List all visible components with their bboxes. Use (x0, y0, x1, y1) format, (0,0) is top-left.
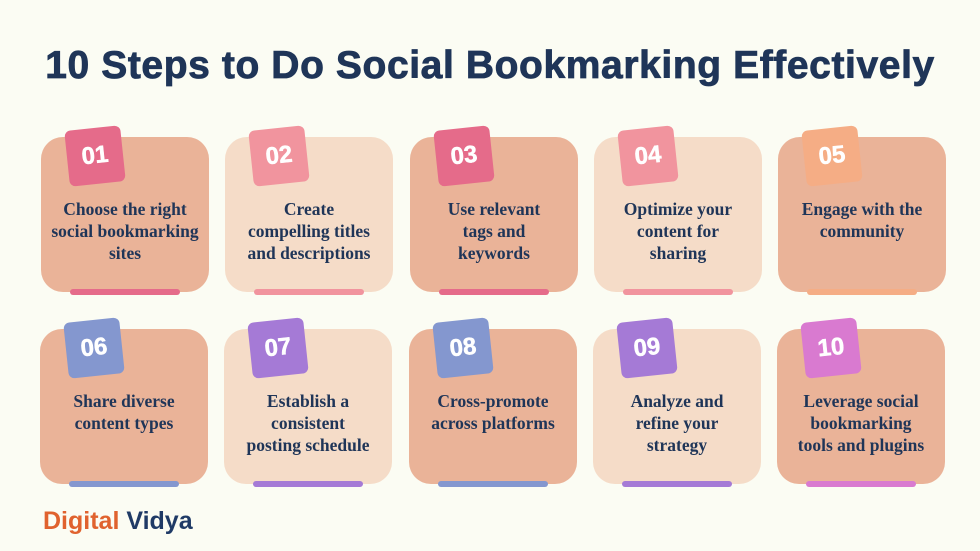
card 10: 10 (816, 333, 846, 362)
card 04: content for (637, 221, 719, 241)
card 03 (410, 137, 578, 292)
card 07: posting schedule (246, 435, 370, 455)
card 10: bookmarking (810, 413, 912, 433)
card 07: consistent (271, 413, 345, 433)
card 04: 04 (633, 141, 663, 170)
card 10 (777, 329, 945, 484)
card 04: sharing (650, 243, 706, 263)
card 09: 09 (632, 333, 662, 362)
card 09: strategy (647, 435, 707, 455)
card 01: sites (109, 243, 141, 263)
card 01 (41, 137, 209, 292)
card 08: Cross-promote (437, 391, 549, 411)
card 03: tags and (463, 221, 525, 241)
card 02: Create (284, 199, 334, 219)
card 02 (225, 137, 393, 292)
card 10: Leverage social (803, 391, 919, 411)
card 06: 06 (79, 333, 109, 362)
card 06: Share diverse (73, 391, 175, 411)
card 01: social bookmarking (51, 221, 199, 241)
card 02: compelling titles (248, 221, 370, 241)
card 07 (224, 329, 392, 484)
card 09: Analyze and (631, 391, 723, 411)
title: 10 Steps to Do Social Bookmarking Effectively (45, 44, 935, 87)
card 02: 02 (264, 141, 294, 170)
card 09: refine your (636, 413, 718, 433)
card 01: 01 (80, 141, 110, 170)
card 04 (594, 137, 762, 292)
card 07: 07 (263, 333, 293, 362)
card 08 (409, 329, 577, 484)
card 01: Choose the right (63, 199, 187, 219)
card 02: and descriptions (247, 243, 370, 263)
card 07: Establish a (267, 391, 349, 411)
logo: Digital Vidya (43, 507, 193, 535)
card 05: Engage with the (802, 199, 922, 219)
card 10: tools and plugins (798, 435, 924, 455)
card 05: 05 (817, 141, 847, 170)
card 04: Optimize your (624, 199, 732, 219)
card 05 (778, 137, 946, 292)
card 09 (593, 329, 761, 484)
card 06: content types (75, 413, 173, 433)
card 05: community (820, 221, 904, 241)
card 08: 08 (448, 333, 478, 362)
card 03: Use relevant (448, 199, 540, 219)
card 03: keywords (458, 243, 530, 263)
card 03: 03 (449, 141, 479, 170)
card 08: across platforms (431, 413, 555, 433)
card 06 (40, 329, 208, 484)
